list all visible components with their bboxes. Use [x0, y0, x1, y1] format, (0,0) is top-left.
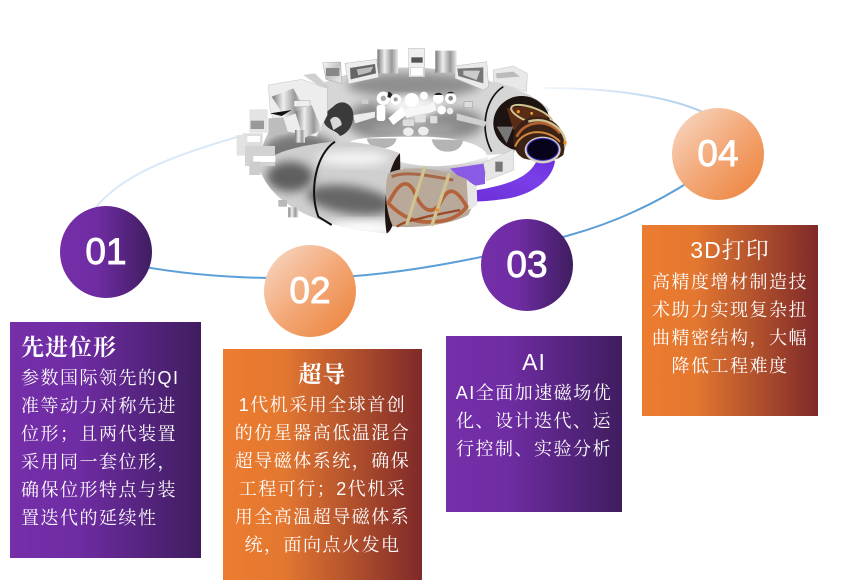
body text: 曲精密结构，大幅	[652, 328, 808, 348]
illustration: stellarator device	[236, 48, 567, 234]
body text: 准等动力对称先进	[21, 396, 177, 416]
torus body	[260, 68, 550, 224]
panel: 先进位形	[10, 322, 201, 558]
heading: 超导	[298, 361, 346, 387]
body text: 高精度增材制造技	[652, 272, 808, 292]
body text: 行控制、实验分析	[456, 439, 612, 459]
body text	[235, 395, 410, 555]
left stacked blocks	[237, 109, 275, 175]
badge 02	[264, 245, 356, 337]
panel: AI	[446, 336, 622, 512]
panel: 3D打印	[642, 225, 818, 416]
body text: 化、设计迭代、运	[456, 411, 612, 431]
lower feet	[278, 200, 298, 217]
body text: 术助力实现复杂扭	[652, 300, 808, 320]
body text: 1代机采用全球首创	[239, 395, 406, 415]
inner lower gray sockets	[367, 138, 463, 152]
top ports and blocks	[323, 48, 527, 92]
body text	[456, 383, 612, 459]
badge 01	[60, 206, 152, 298]
body text: AI全面加速磁场优	[456, 383, 612, 403]
badge 03	[481, 219, 573, 311]
badge 04	[672, 108, 764, 200]
left mechanism cluster	[268, 73, 330, 143]
purple plasma	[470, 161, 555, 202]
body text: 超导磁体系统，确保	[235, 451, 410, 471]
body text: 统，面向点火发电	[244, 535, 400, 555]
panel: 超导	[223, 349, 422, 580]
heading: 3D打印	[690, 237, 770, 263]
body text: 位形；且两代装置	[21, 424, 177, 444]
badge 03: 03	[506, 244, 548, 285]
heading: AI	[522, 349, 546, 375]
body text	[652, 272, 808, 376]
body text: 采用同一套位形，	[21, 452, 177, 472]
body text: 参数国际领先的QI	[21, 368, 180, 388]
body text	[21, 368, 180, 528]
cut plasma section with coils, right end	[485, 87, 567, 163]
badge 01: 01	[85, 231, 127, 272]
purple plasma behind plate	[450, 163, 485, 187]
front shell	[260, 140, 400, 234]
body text: 的仿星器高低温混合	[235, 423, 410, 443]
body text: 工程可行；2代机采	[239, 479, 406, 499]
central diagnostics cluster	[323, 92, 487, 136]
heading: 先进位形	[21, 334, 117, 360]
badge 04: 04	[697, 133, 739, 174]
body text: 确保位形特点与装	[21, 480, 177, 500]
body text: 降低工程难度	[672, 356, 788, 376]
silver lower band	[393, 156, 488, 176]
badge 02: 02	[289, 270, 331, 311]
body text: 用全高温超导磁体系	[235, 507, 410, 527]
support plate	[483, 149, 514, 181]
copper coils, front cut	[386, 167, 477, 227]
body text: 置迭代的延续性	[21, 508, 158, 528]
